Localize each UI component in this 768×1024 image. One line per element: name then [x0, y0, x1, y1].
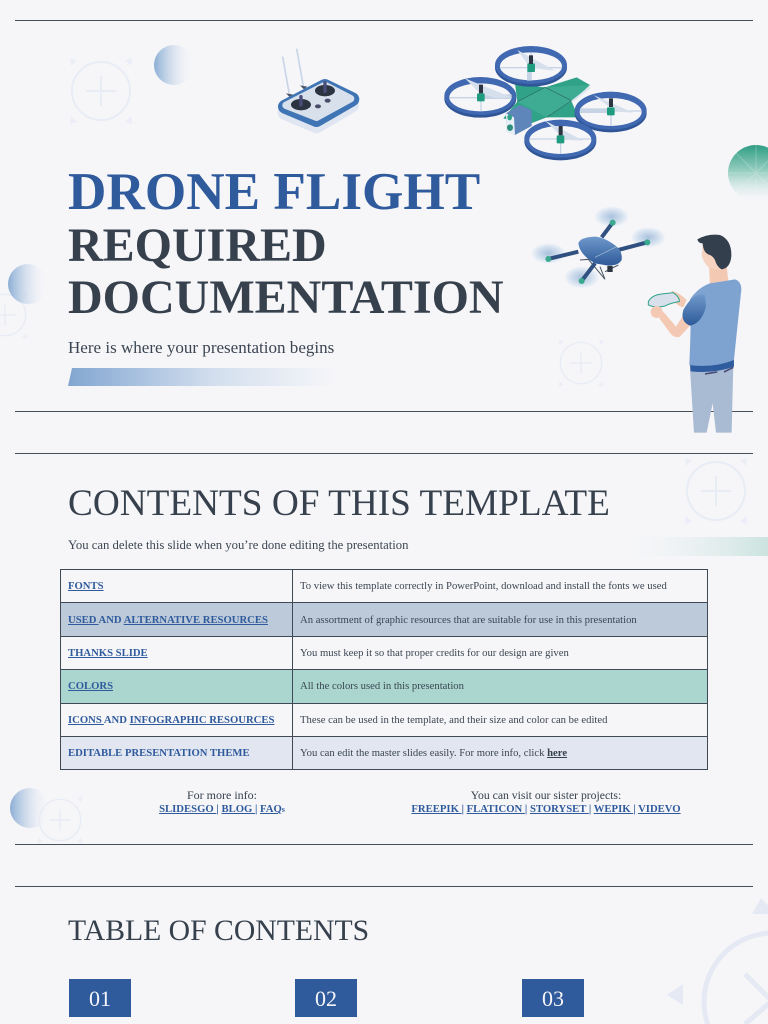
contents table: [60, 569, 708, 770]
icon: target contents: [685, 458, 747, 524]
contents table: You can edit the master slides easily. For more info, click here: [300, 747, 567, 759]
sister projects links: FREEPIK | FLATICON | STORYSET | WEPIK | VIDEVO: [411, 803, 681, 815]
title: DRONE FLIGHT: [68, 162, 480, 221]
rotor ring left: [444, 77, 516, 118]
icon: target left edge: [0, 291, 27, 339]
sister projects links: [411, 789, 681, 815]
tagline: Here is where your presentation begins: [68, 338, 334, 357]
contents table: These can be used in the template, and their size and color can be edited: [300, 714, 607, 726]
icon: gradient circle left: [8, 264, 48, 304]
illustration: large green drone: [444, 46, 647, 160]
contents table: COLORS: [68, 680, 113, 692]
contents table: ICONS AND INFOGRAPHIC RESOURCES: [68, 714, 274, 726]
heading: table of contents: TABLE OF CONTENTS: [68, 915, 369, 947]
heading: contents: CONTENTS OF THIS TEMPLATE: [68, 483, 610, 524]
icon: gradient circle lower left: [10, 788, 50, 828]
green gradient bar: [610, 537, 768, 556]
icon: gradient circle top: [154, 45, 194, 85]
rotor ring front: [524, 120, 596, 160]
icon: remote controller: [283, 49, 352, 126]
number box 03: 03: [542, 986, 564, 1011]
contents table: EDITABLE PRESENTATION THEME: [68, 747, 250, 759]
number box 02: 02: [315, 986, 337, 1011]
icon: target middle: [559, 339, 603, 387]
illustration: man holding controller: [648, 235, 741, 433]
camera: [506, 105, 532, 135]
contents table: To view this template correctly in PowerPoint, download and install the fonts we used: [300, 580, 667, 592]
contents table: You must keep it so that proper credits for our design are given: [300, 647, 569, 659]
icon: large target bottom right: [667, 898, 768, 1024]
number box 01: 01: [89, 986, 111, 1011]
more info links: For more info:: [187, 788, 257, 802]
number box 02: [295, 979, 357, 1017]
subtitle heading line one: REQUIRED: [68, 219, 327, 272]
contents table: USED AND ALTERNATIVE RESOURCES: [68, 614, 268, 626]
icon: target lower left: [38, 796, 82, 844]
more info links: SLIDESGO | BLOG | FAQs: [159, 803, 285, 815]
number box 01: [69, 979, 131, 1017]
contents table: An assortment of graphic resources that are suitable for use in this presentation: [300, 614, 637, 626]
contents table: All the colors used in this presentation: [300, 680, 464, 692]
subtitle heading line two: DOCUMENTATION: [68, 271, 504, 324]
rotor ring back: [495, 46, 567, 87]
gradient bar: [68, 368, 308, 386]
icon: green fan circle: [728, 145, 768, 201]
contents table: FONTS: [68, 580, 104, 592]
sister projects links: You can visit our sister projects:: [471, 789, 621, 802]
icon: target top left: [70, 58, 132, 124]
rotor ring right: [575, 92, 647, 132]
contents note: You can delete this slide when you’re done editing the presentation: [68, 538, 408, 552]
contents table: THANKS SLIDE: [68, 647, 148, 659]
number box 03: [522, 979, 584, 1017]
illustration: flying drone: [532, 207, 665, 288]
more info links: [159, 788, 285, 815]
